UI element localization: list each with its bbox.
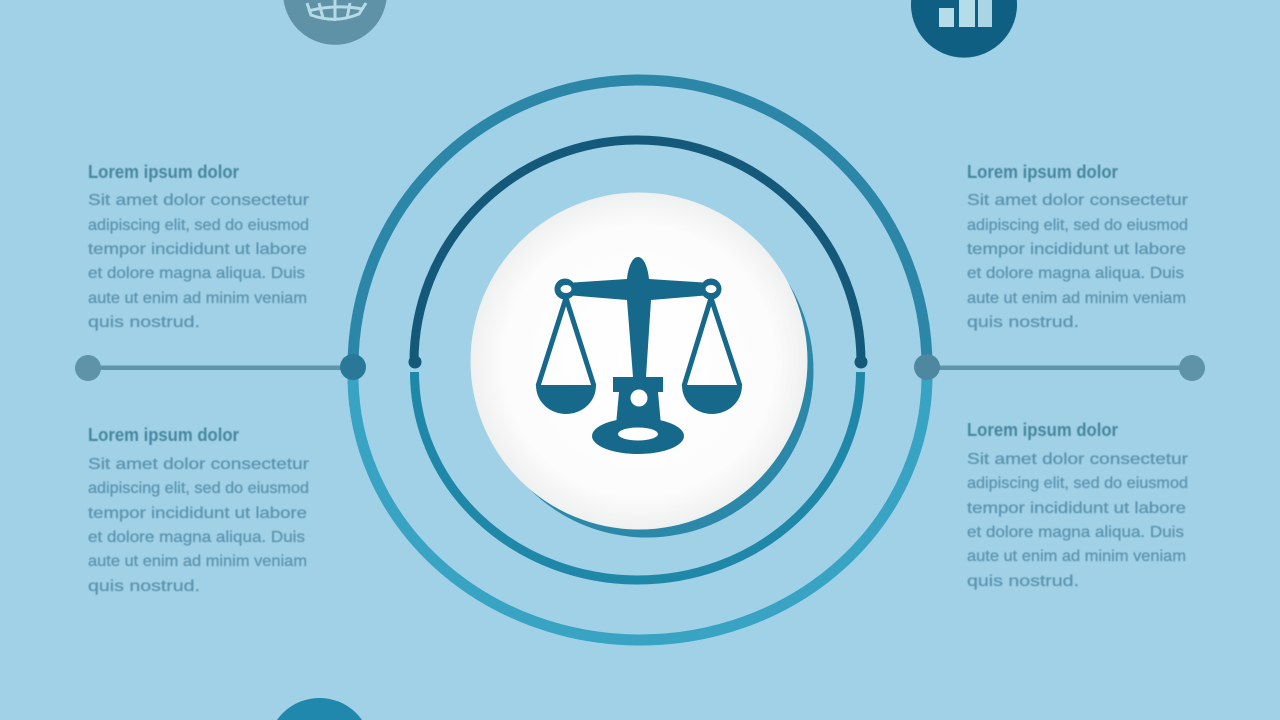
- text block: lower right: tempor incididunt ut labore: [967, 500, 1186, 517]
- text block: lower right: Sit amet dolor consectetur: [967, 451, 1189, 468]
- text block: lower right: adipiscing elit, sed do eiusmod: [967, 475, 1188, 492]
- text block: lower right: [967, 420, 1189, 590]
- text block: lower left: aute ut enim ad minim veniam: [88, 553, 307, 570]
- inner ring: [408, 140, 868, 580]
- text block: lower right: Lorem ipsum dolor: [967, 420, 1118, 440]
- text block: upper right: Sit amet dolor consectetur: [967, 192, 1189, 209]
- text block: upper left: tempor incididunt ut labore: [88, 241, 307, 258]
- right connector line: [927, 355, 1205, 381]
- text block: lower left: et dolore magna aliqua. Duis: [88, 529, 305, 546]
- text block: upper left: [88, 162, 310, 331]
- text block: upper left: et dolore magna aliqua. Duis: [88, 265, 305, 282]
- right ring node: [914, 354, 940, 380]
- icon: bar chart badge: [911, 0, 1017, 58]
- text block: upper right: Lorem ipsum dolor: [967, 162, 1118, 182]
- text block: upper right: aute ut enim ad minim veniam: [967, 290, 1186, 307]
- icon: partial bottom badge: [277, 698, 362, 720]
- left connector line: [75, 355, 353, 381]
- text block: lower left: [88, 425, 310, 595]
- text block: upper left: quis nostrud.: [88, 314, 200, 331]
- text block: upper right: quis nostrud.: [967, 314, 1079, 331]
- text block: upper left: adipiscing elit, sed do eiusmod: [88, 217, 309, 234]
- outer ring: [353, 80, 927, 640]
- text block: lower right: et dolore magna aliqua. Duis: [967, 524, 1184, 541]
- text block: upper right: tempor incididunt ut labore: [967, 241, 1186, 258]
- text block: lower left: adipiscing elit, sed do eiusmod: [88, 480, 309, 497]
- text block: upper left: aute ut enim ad minim veniam: [88, 290, 307, 307]
- center disc: [470, 192, 814, 538]
- text block: lower left: Lorem ipsum dolor: [88, 425, 239, 445]
- text block: lower right: aute ut enim ad minim veniam: [967, 548, 1186, 565]
- text block: upper left: Sit amet dolor consectetur: [88, 192, 310, 209]
- text block: lower left: quis nostrud.: [88, 578, 200, 595]
- text block: lower left: tempor incididunt ut labore: [88, 505, 307, 522]
- text block: upper left: Lorem ipsum dolor: [88, 162, 239, 182]
- icon: globe badge: [284, 0, 386, 45]
- left ring node: [340, 354, 366, 380]
- text block: upper right: [967, 162, 1189, 331]
- text block: upper right: adipiscing elit, sed do eiusmod: [967, 217, 1188, 234]
- text block: upper right: et dolore magna aliqua. Duis: [967, 265, 1184, 282]
- icon: scales of justice: [536, 257, 742, 454]
- text block: lower right: quis nostrud.: [967, 573, 1079, 590]
- text block: lower left: Sit amet dolor consectetur: [88, 456, 310, 473]
